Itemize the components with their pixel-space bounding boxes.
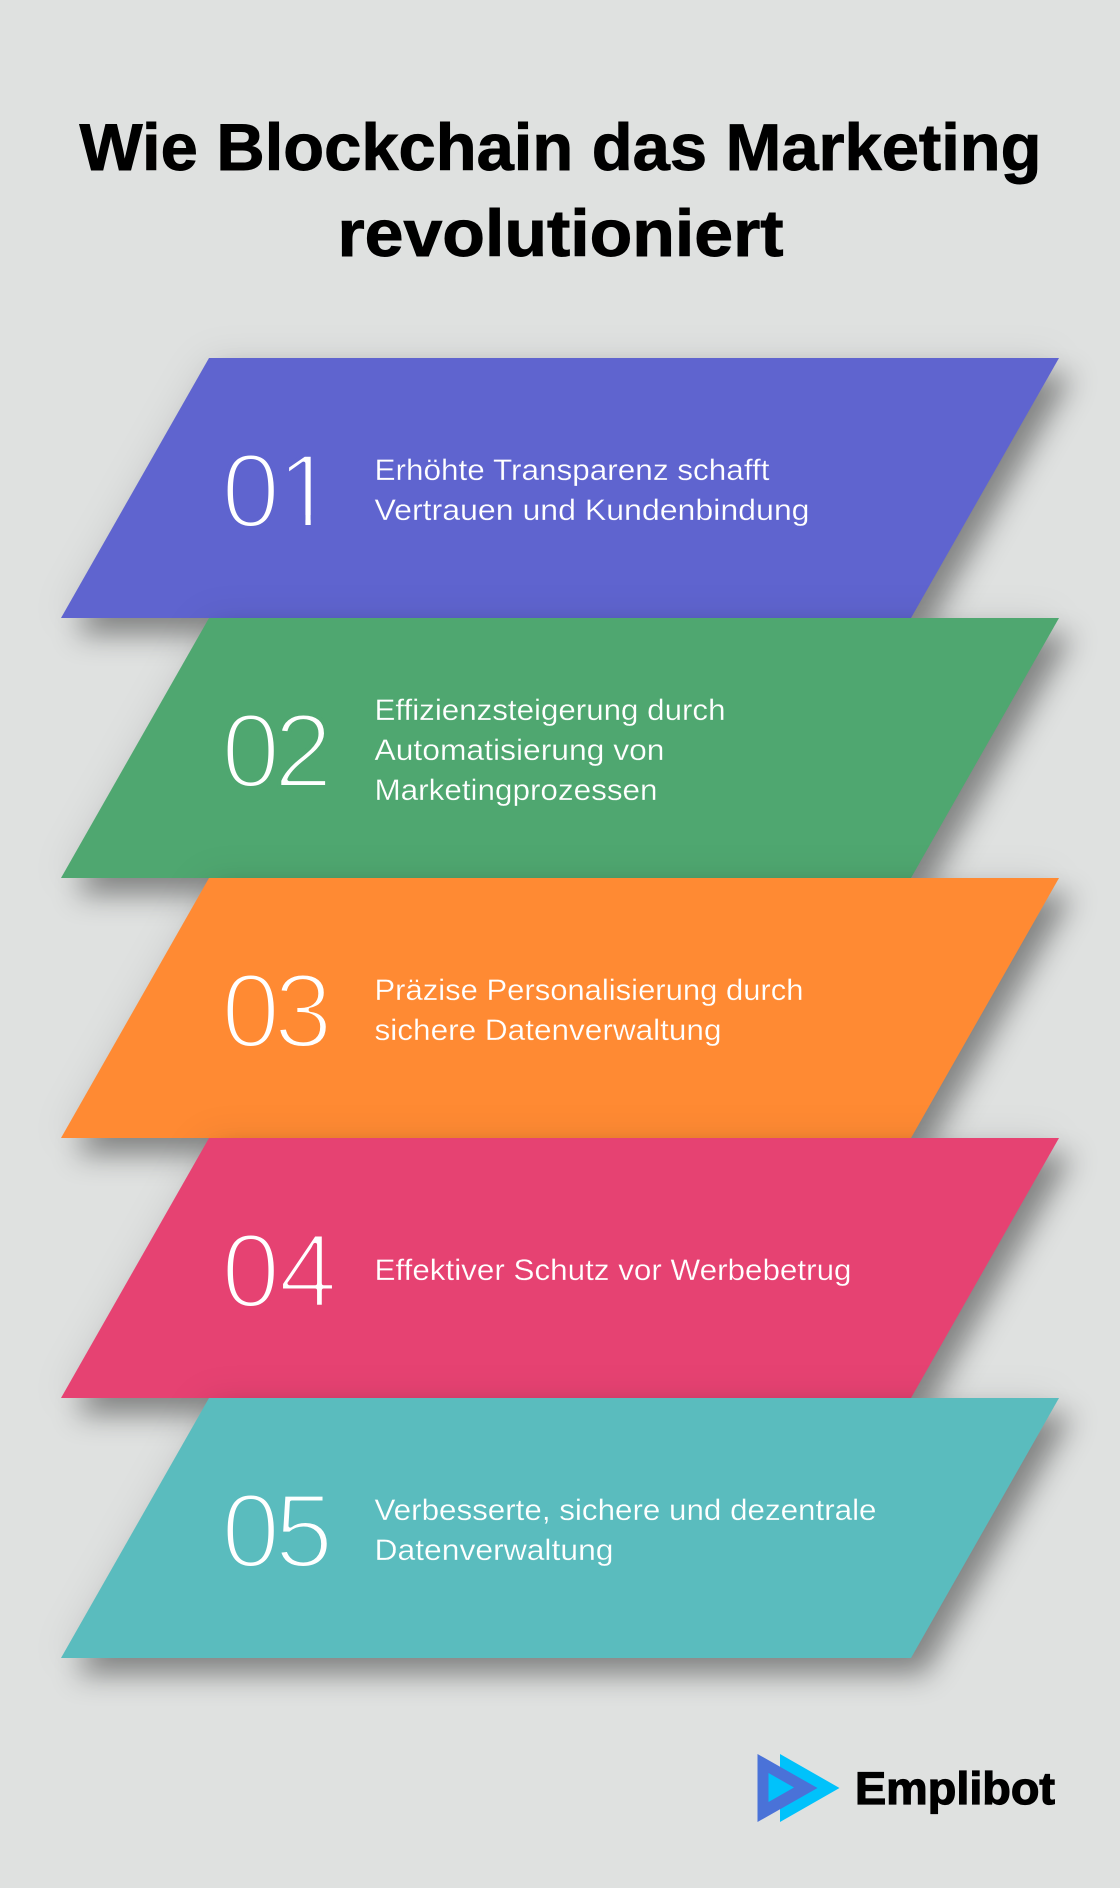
- title: [80, 110, 1042, 270]
- number 01: 01: [222, 433, 335, 550]
- panel: step 03: [61, 878, 1059, 1138]
- text: step 05: Verbesserte, sichere und dezentrale: [374, 1494, 876, 1527]
- title: Wie Blockchain das Marketing: [80, 110, 1042, 184]
- text: step 03: sichere Datenverwaltung: [374, 1014, 722, 1047]
- title: revolutioniert: [338, 196, 784, 270]
- number 02: 02: [222, 693, 332, 810]
- panel: step 02: [61, 618, 1059, 878]
- panel: step 05: [61, 1398, 1059, 1658]
- text: step 01: [374, 454, 810, 527]
- logo wordmark: Emplibot: [855, 1763, 1055, 1814]
- text: step 03: Präzise Personalisierung durch: [374, 974, 804, 1007]
- text: step 02: Effizienzsteigerung durch: [374, 694, 726, 727]
- panel: step 04: [61, 1138, 1059, 1398]
- text: step 05: Datenverwaltung: [374, 1534, 614, 1567]
- text: step 03: [374, 974, 804, 1047]
- panel: step 01: [61, 358, 1059, 618]
- text: step 02: Automatisierung von: [374, 734, 664, 767]
- text: step 04: Effektiver Schutz vor Werbebetrug: [374, 1254, 852, 1287]
- number 05: 05: [222, 1473, 333, 1590]
- text: step 01: Erhöhte Transparenz schafft: [374, 454, 770, 487]
- text: step 02: [374, 694, 726, 807]
- number 04: 04: [222, 1213, 337, 1330]
- text: step 02: Marketingprozessen: [374, 774, 658, 807]
- logo: Emplibot: [758, 1754, 1055, 1822]
- number 03: 03: [222, 953, 332, 1070]
- icon: play triangles: [758, 1754, 840, 1822]
- text: step 05: [374, 1494, 876, 1567]
- text: step 01: Vertrauen und Kundenbindung: [374, 494, 810, 527]
